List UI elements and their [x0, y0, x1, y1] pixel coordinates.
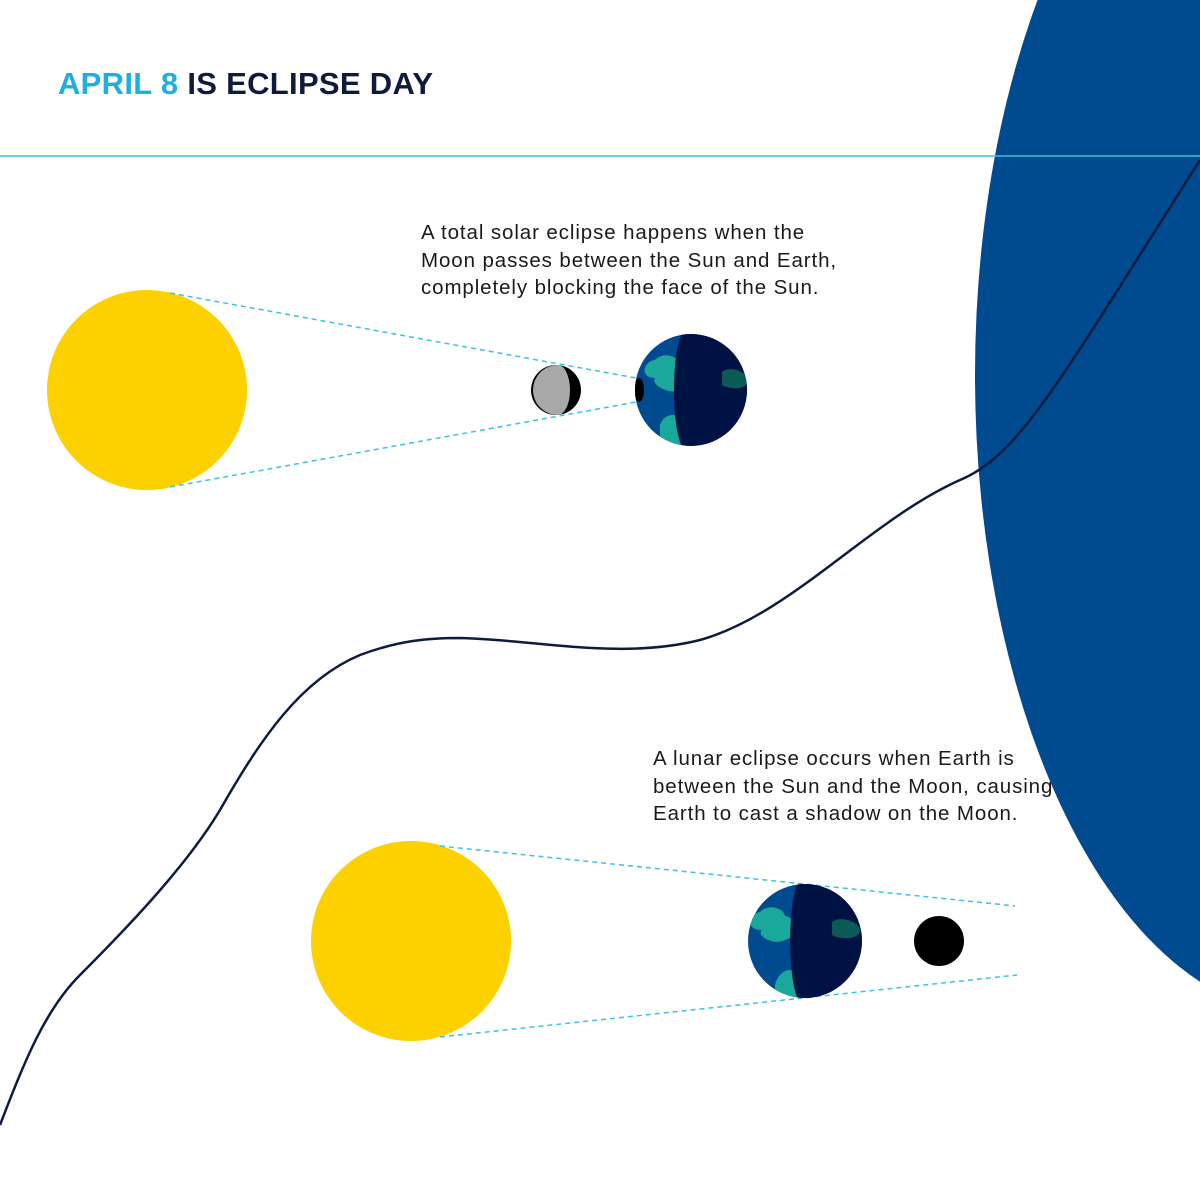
black moon: [914, 916, 964, 966]
shadow lines 2: [440, 846, 1017, 1037]
text: lunar eclipse: Earth to cast a shadow on the Moon.: [653, 802, 1018, 825]
text: solar eclipse: completely blocking the face of the Sun.: [421, 276, 819, 299]
blue ellipse: [975, 0, 1200, 1015]
text: lunar eclipse: between the Sun and the Moon, causing: [653, 774, 1053, 798]
title: APRIL 8 IS ECLIPSE DAY: [58, 66, 433, 101]
text: solar eclipse: A total solar eclipse happens when the: [421, 221, 805, 244]
earth 2: [748, 884, 862, 998]
earth 1: [635, 334, 747, 446]
cyan rule: [0, 155, 1200, 157]
text: lunar eclipse: [653, 747, 1053, 825]
text: lunar eclipse: A lunar eclipse occurs when Earth is: [653, 747, 1015, 770]
sun 2: [311, 841, 511, 1041]
text: solar eclipse: Moon passes between the Sun and Earth,: [421, 248, 837, 272]
solar eclipse group: [47, 290, 760, 490]
text: solar eclipse: [421, 221, 837, 299]
moon 1: [531, 365, 581, 415]
shadow lines 1: [170, 293, 636, 487]
sun 1: [47, 290, 247, 490]
lunar eclipse group: [311, 841, 1017, 1041]
